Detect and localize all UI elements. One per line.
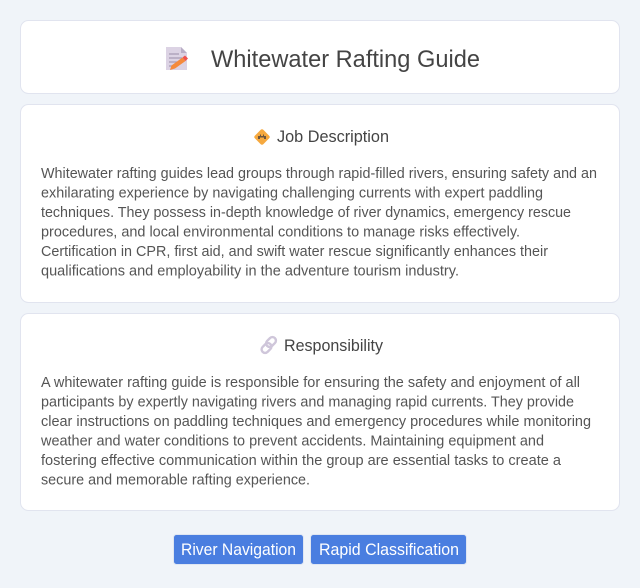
heading: job description: Job Description	[277, 128, 389, 146]
tag: river navigation: River Navigation	[181, 541, 296, 559]
tag: river navigation	[174, 534, 304, 564]
text block: responsibility: secure and memorable rafting experience.	[41, 472, 310, 488]
tag: rapid classification: Rapid Classification	[319, 541, 459, 559]
tag: rapid classification	[310, 534, 466, 564]
text block: responsibility: participants by expertly navigating rivers and managing rapid currents. They provide	[41, 394, 574, 410]
text block: job description: techniques. They possess in-depth knowledge of river dynamics, emergency rescue	[41, 205, 571, 221]
icon: memo with pencil	[166, 47, 188, 70]
text block: job description	[41, 166, 597, 280]
text block: responsibility	[40, 375, 591, 488]
text block: job description: Certification in CPR, first aid, and swift water rescue significantly enhances their	[41, 244, 548, 260]
text block: job description: Whitewater rafting guides lead groups through rapid-filled rivers, ensuring safety and an	[41, 166, 597, 182]
heading: responsibility: Responsibility	[284, 337, 384, 355]
text block: job description: procedures, and local environmental conditions to manage risks effectively.	[41, 224, 520, 240]
panel: responsibility	[20, 314, 620, 510]
panel: job description	[20, 104, 620, 302]
panel: title header	[20, 20, 620, 94]
text block: responsibility: weather and water conditions to prevent accidents. Maintaining equipment and	[40, 434, 544, 450]
icon: orange warning diamond	[254, 129, 270, 145]
text block: responsibility: A whitewater rafting guide is responsible for ensuring the safety and enjoyment of all	[41, 375, 580, 391]
text block: responsibility: clear instructions on paddling techniques and emergency procedures while monitoring	[41, 414, 591, 430]
text block: job description: exhilarating experience by navigating challenging currents with expert paddling	[41, 186, 543, 202]
title: Whitewater Rafting Guide	[211, 46, 480, 73]
text block: job description: qualifications and employability in the adventure tourism industry.	[41, 264, 459, 280]
text block: responsibility: fostering effective communication within the group are essential tasks to create a	[41, 453, 562, 469]
icon: link	[260, 336, 277, 354]
